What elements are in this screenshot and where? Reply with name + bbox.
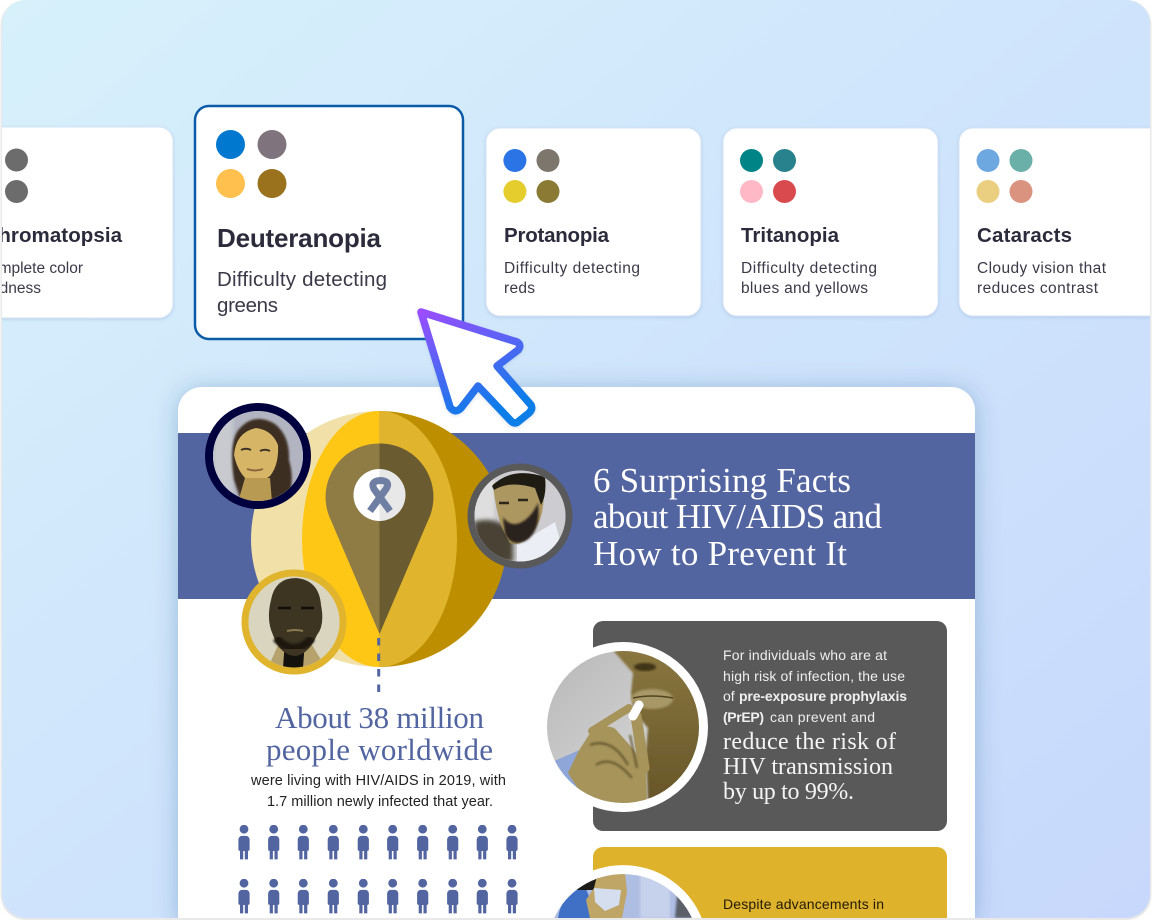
PrEP body text <box>723 647 907 725</box>
globe with location pin <box>251 411 507 694</box>
card title: Tritanopia: Tritanopia <box>741 224 840 247</box>
portrait: bald man <box>245 573 343 671</box>
PrEP highlight text <box>723 729 896 805</box>
advancements body text: Despite advancements in <box>723 896 884 912</box>
colour swatches: Deuteranopia <box>216 130 286 198</box>
card description: Tritanopia: Difficulty detecting <box>741 260 877 277</box>
infographic panel <box>178 387 975 921</box>
card description: Protanopia: reds <box>504 280 535 297</box>
PrEP body text: pre-exposure prophylaxis <box>739 688 907 704</box>
PrEP body text: of <box>723 688 735 704</box>
banner <box>178 433 975 599</box>
PrEP body text: can prevent and <box>770 709 875 725</box>
card: Achromatopsia <box>0 127 173 318</box>
card: Protanopia <box>486 128 701 316</box>
pictogram: people <box>238 825 518 913</box>
infographic title: about HIV/AIDS and <box>593 497 882 536</box>
infographic title: 6 Surprising Facts <box>593 461 851 500</box>
statistic body text: were living with HIV/AIDS in 2019, with <box>250 773 506 789</box>
PrEP highlight text: HIV transmission <box>723 754 893 780</box>
card: Tritanopia <box>723 128 938 316</box>
photo: pill held to lips <box>538 642 708 812</box>
card title: Deuteranopia: Deuteranopia <box>217 223 382 253</box>
statistic heading <box>266 706 492 766</box>
colour swatches: Tritanopia <box>740 149 796 203</box>
photo: nurse in mask <box>544 865 702 918</box>
statistic heading: About 38 million <box>275 700 484 735</box>
fact panel: PrEP <box>538 621 947 831</box>
dashed pin line <box>377 638 380 694</box>
card description: Protanopia: Difficulty detecting <box>504 260 640 277</box>
colour swatches: Achromatopsia <box>5 148 28 203</box>
PrEP highlight text: by up to 99%. <box>723 779 854 805</box>
card: Deuteranopia (selected) <box>195 106 463 339</box>
card description: Cataracts: reduces contrast <box>977 280 1099 297</box>
statistic heading: people worldwide <box>266 732 493 767</box>
infographic title <box>594 468 882 566</box>
colour swatches: Protanopia <box>503 149 560 203</box>
PrEP body text: high risk of infection, the use <box>723 668 905 684</box>
card description: Cataracts <box>978 262 1106 293</box>
card description: Deuteranopia <box>217 268 387 317</box>
infographic title: How to Prevent It <box>593 534 847 573</box>
portrait: bearded man <box>471 467 569 565</box>
map pin <box>326 443 433 634</box>
statistic body text: 1.7 million newly infected that year. <box>267 794 493 810</box>
card title: Protanopia: Protanopia <box>504 224 610 247</box>
portrait: woman <box>209 407 307 505</box>
card description: Deuteranopia: Difficulty detecting <box>217 268 387 291</box>
fact panel: advancements <box>544 847 947 921</box>
icon: awareness ribbon <box>354 469 406 521</box>
card: Cataracts <box>959 128 1152 316</box>
cursor arrow <box>421 312 532 423</box>
statistic body text <box>250 773 506 810</box>
card description: Cataracts: Cloudy vision that <box>977 260 1107 277</box>
card description: Tritanopia <box>741 260 877 297</box>
PrEP body text: For individuals who are at <box>723 647 887 663</box>
card title: Cataracts: Cataracts <box>977 224 1072 247</box>
PrEP highlight text: reduce the risk of <box>723 729 896 755</box>
colour swatches: Cataracts <box>976 149 1032 203</box>
PrEP body text: (PrEP) <box>723 709 764 725</box>
card description: Tritanopia: blues and yellows <box>741 280 868 297</box>
card description: Protanopia <box>505 262 639 293</box>
card description: Deuteranopia: greens <box>217 294 278 317</box>
